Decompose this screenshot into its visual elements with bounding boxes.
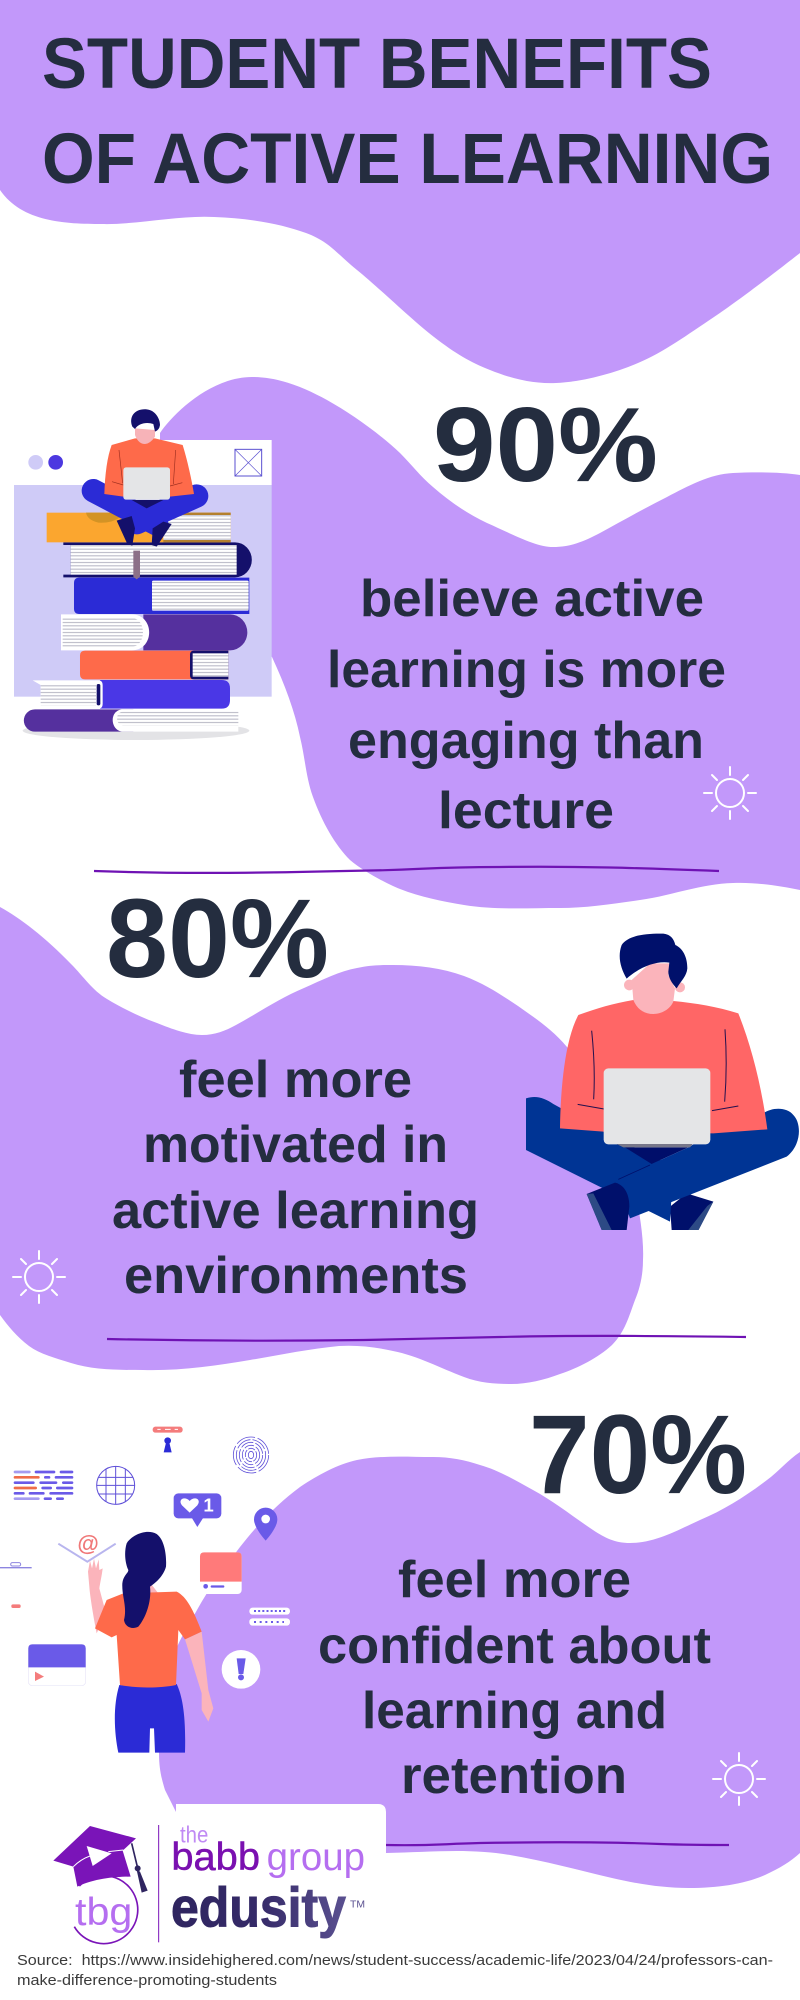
title: OF ACTIVE LEARNING xyxy=(42,120,773,199)
text block: 80% description: environments xyxy=(124,1247,468,1305)
head xyxy=(620,934,687,1014)
text block: 80% description xyxy=(112,1051,479,1305)
illustration: student on stack of books xyxy=(14,409,272,740)
student figure xyxy=(93,409,197,547)
icon: sun xyxy=(713,1753,765,1805)
text block: 90% description: engaging than xyxy=(348,712,704,770)
text block: 90% description: learning is more xyxy=(327,641,726,699)
small interface marks xyxy=(0,1563,32,1608)
laptop xyxy=(604,1068,710,1147)
icon: image card xyxy=(200,1552,242,1594)
icon: password fields xyxy=(249,1608,290,1626)
woman figure xyxy=(88,1532,213,1753)
icon: graduation cap xyxy=(53,1826,148,1893)
source text: make-difference-promoting-students xyxy=(17,1973,277,1989)
title xyxy=(42,25,773,199)
text block: 80% description: motivated in xyxy=(143,1116,448,1174)
panel: logo card xyxy=(176,1804,386,1905)
shoe and leg crease xyxy=(587,1165,650,1230)
icon: sun xyxy=(13,1251,65,1303)
wordmark: babb: babb xyxy=(171,1836,260,1879)
panel: header blob xyxy=(0,0,800,383)
text block: 70% description: learning and xyxy=(362,1682,667,1740)
icon: code lines xyxy=(15,1472,72,1499)
sweater xyxy=(560,1000,767,1133)
text block: 70% description: confident about xyxy=(318,1617,711,1675)
icon: globe xyxy=(97,1466,135,1504)
icon: video card xyxy=(28,1644,86,1686)
text block: 70% description: feel more xyxy=(398,1551,631,1609)
logo: the babb group edusity xyxy=(53,1822,365,1944)
wordmark: the: the xyxy=(180,1822,208,1848)
text block: 70% description: retention xyxy=(401,1747,627,1805)
logo ring xyxy=(74,1876,138,1944)
wordmark: edusity: edusity xyxy=(171,1877,346,1939)
icon: at sign envelope xyxy=(58,1531,116,1562)
icon: lock bar and keyhole xyxy=(153,1427,183,1452)
browser window background xyxy=(14,440,272,697)
illustration: large student with laptop xyxy=(526,934,799,1230)
icon: at sign envelope: @ xyxy=(77,1531,99,1556)
icon: sun xyxy=(704,767,756,819)
panel: 80% blob xyxy=(0,907,643,1384)
text block: 70% description xyxy=(318,1551,711,1805)
text block: 90% description: lecture xyxy=(438,782,614,840)
trademark: TM xyxy=(350,1899,365,1910)
tbg mark: tbg xyxy=(75,1891,132,1934)
illustration: woman with floating digital icons xyxy=(0,1427,290,1753)
legs xyxy=(526,1097,799,1230)
wordmark: group: group xyxy=(267,1836,365,1879)
source text xyxy=(17,1953,773,1989)
icon: map pin xyxy=(254,1508,277,1541)
stat: 90%: 90% xyxy=(433,386,658,504)
icon: alert xyxy=(222,1650,260,1689)
book stack xyxy=(23,513,252,740)
icon: fingerprint xyxy=(233,1437,269,1473)
icon: like bubble xyxy=(174,1493,221,1527)
text block: 90% description: believe active xyxy=(360,570,704,628)
stat: 80%: 80% xyxy=(106,876,329,1001)
title: STUDENT BENEFITS xyxy=(42,25,712,104)
panel: 70% blob xyxy=(159,1452,800,1888)
text block: 80% description: feel more xyxy=(179,1051,412,1109)
stat: 70%: 70% xyxy=(529,1392,747,1517)
panel: 90% blob xyxy=(160,377,800,908)
text block: 90% description xyxy=(327,570,726,840)
icon: like bubble: 1 xyxy=(203,1494,214,1515)
source text: Source: https://www.insidehighered.com/news/student-success/academic-life/2023/04/24/professors-can- xyxy=(17,1953,773,1969)
text block: 80% description: active learning xyxy=(112,1182,479,1240)
